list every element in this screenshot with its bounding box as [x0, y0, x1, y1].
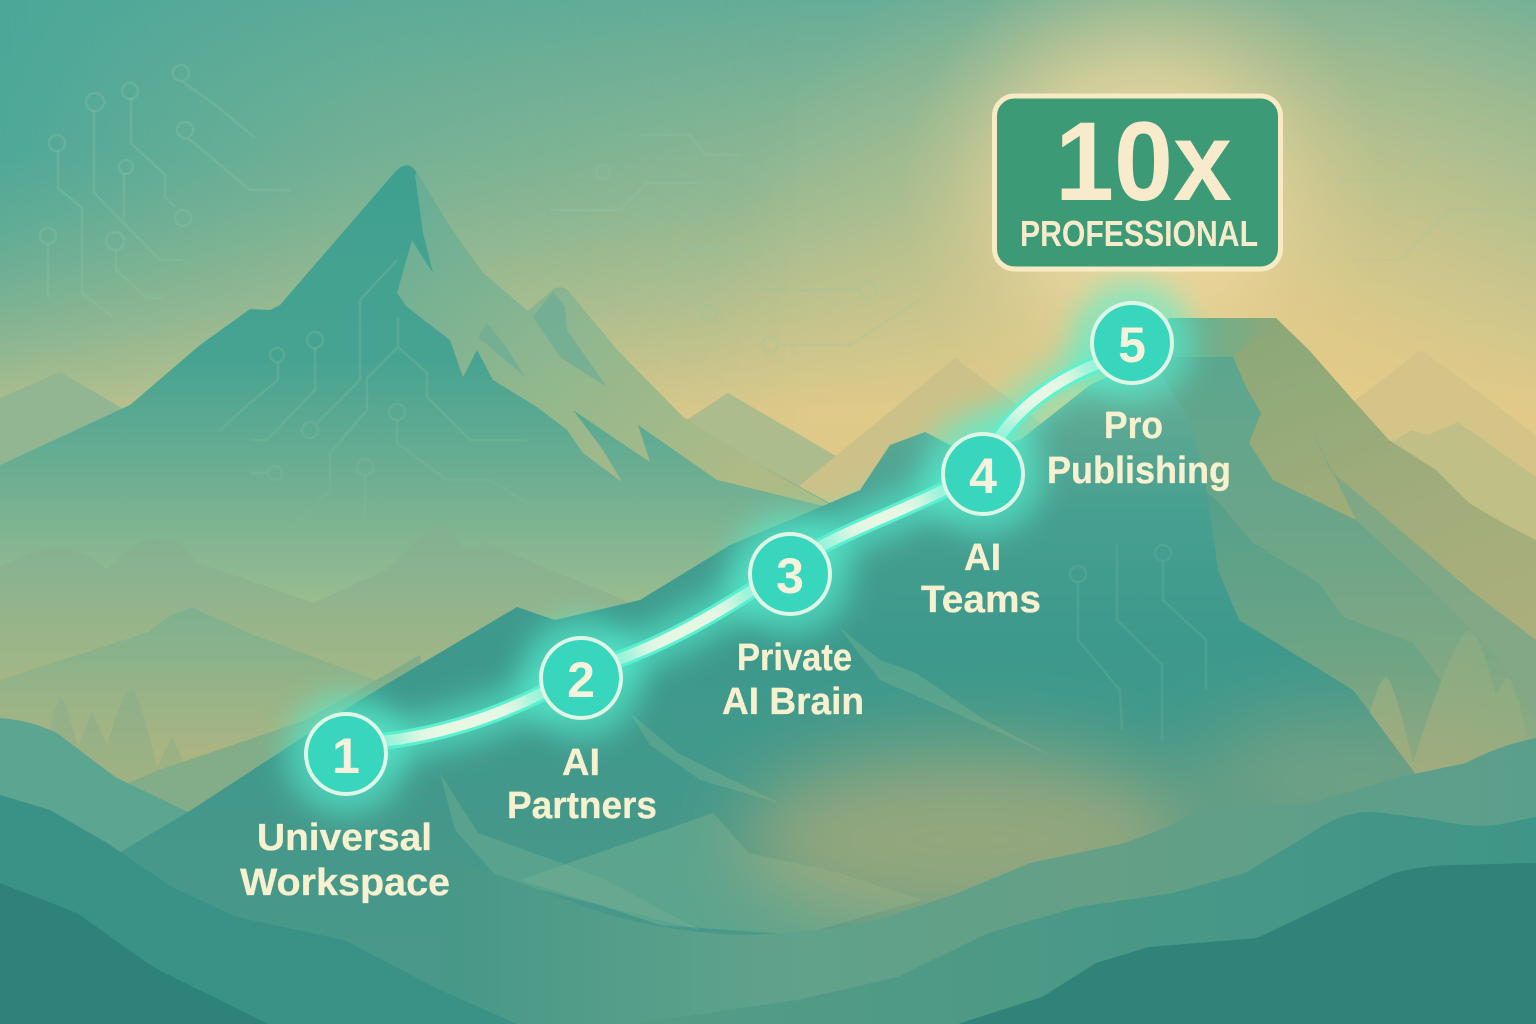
top band of right mountain: [1150, 318, 1276, 357]
step 2 node: [519, 616, 643, 740]
step 1 label: Universal: [257, 817, 432, 859]
step 2 node: 2: [567, 652, 595, 708]
dark front hill left: [0, 795, 517, 1024]
step 5 label: [1047, 405, 1231, 492]
main mountain: [0, 165, 880, 720]
left front hill: [0, 718, 188, 900]
step 4 node: [921, 412, 1045, 536]
step 1 node: 1: [332, 728, 360, 784]
badge headline: 10x: [1055, 99, 1232, 224]
step 3 label: AI Brain: [722, 681, 864, 723]
step 1 node: [284, 692, 408, 816]
darkest front hill left: [0, 883, 268, 1024]
distant trees: [50, 688, 190, 790]
distant mountains: [0, 350, 1536, 680]
step 2 label: [507, 742, 657, 827]
right mountain layer a: [1050, 357, 1536, 860]
step 3 node: [728, 512, 852, 636]
right mountain: [1000, 318, 1536, 860]
haze glow over lower ridge: [740, 710, 1530, 930]
step 4 label: [921, 537, 1041, 621]
step 5 label: Publishing: [1047, 450, 1231, 492]
right mountain spires: [1328, 630, 1536, 800]
glowing path connecting steps: [346, 352, 1132, 744]
sky background: [0, 0, 1536, 456]
step 5 label: Pro: [1104, 405, 1163, 447]
right mountain streak: [1311, 428, 1536, 720]
step 3 node: 3: [776, 548, 804, 604]
far front hill right: [440, 738, 1536, 1024]
step 3 label: Private: [737, 637, 852, 679]
step 1 label: Workspace: [240, 862, 450, 904]
badge subtitle: PROFESSIONAL: [1020, 213, 1258, 254]
darkest front hill right: [958, 863, 1536, 1024]
ridge light streaks: [440, 627, 1054, 935]
step 4 label: AI: [964, 537, 1001, 579]
mid hills left: [0, 520, 740, 860]
ridge circuit traces: [1070, 545, 1206, 740]
mountain highlight facets: [397, 173, 840, 510]
step 5 node: 5: [1118, 317, 1146, 373]
pale foothill strip: [100, 655, 440, 860]
step 3 label: [722, 637, 864, 723]
step 5 node: [1070, 281, 1194, 405]
second front hill: [630, 812, 1536, 1024]
step 1 label: [240, 817, 450, 904]
mountain shadow facets: [478, 292, 607, 387]
step 2 label: Partners: [507, 785, 657, 827]
foreground hills: [0, 718, 1536, 1024]
step 2 label: AI: [562, 742, 600, 784]
right mountain layer c: [1050, 500, 1420, 860]
step 4 node: 4: [969, 448, 997, 504]
10x professional badge: [994, 96, 1280, 269]
right mountain layer b: [1050, 440, 1500, 860]
circuit traces on mountain: [220, 260, 533, 527]
faint circuit lines: [40, 65, 1530, 353]
step 4 label: Teams: [921, 579, 1041, 621]
central mountain ridge: [100, 357, 1440, 1024]
